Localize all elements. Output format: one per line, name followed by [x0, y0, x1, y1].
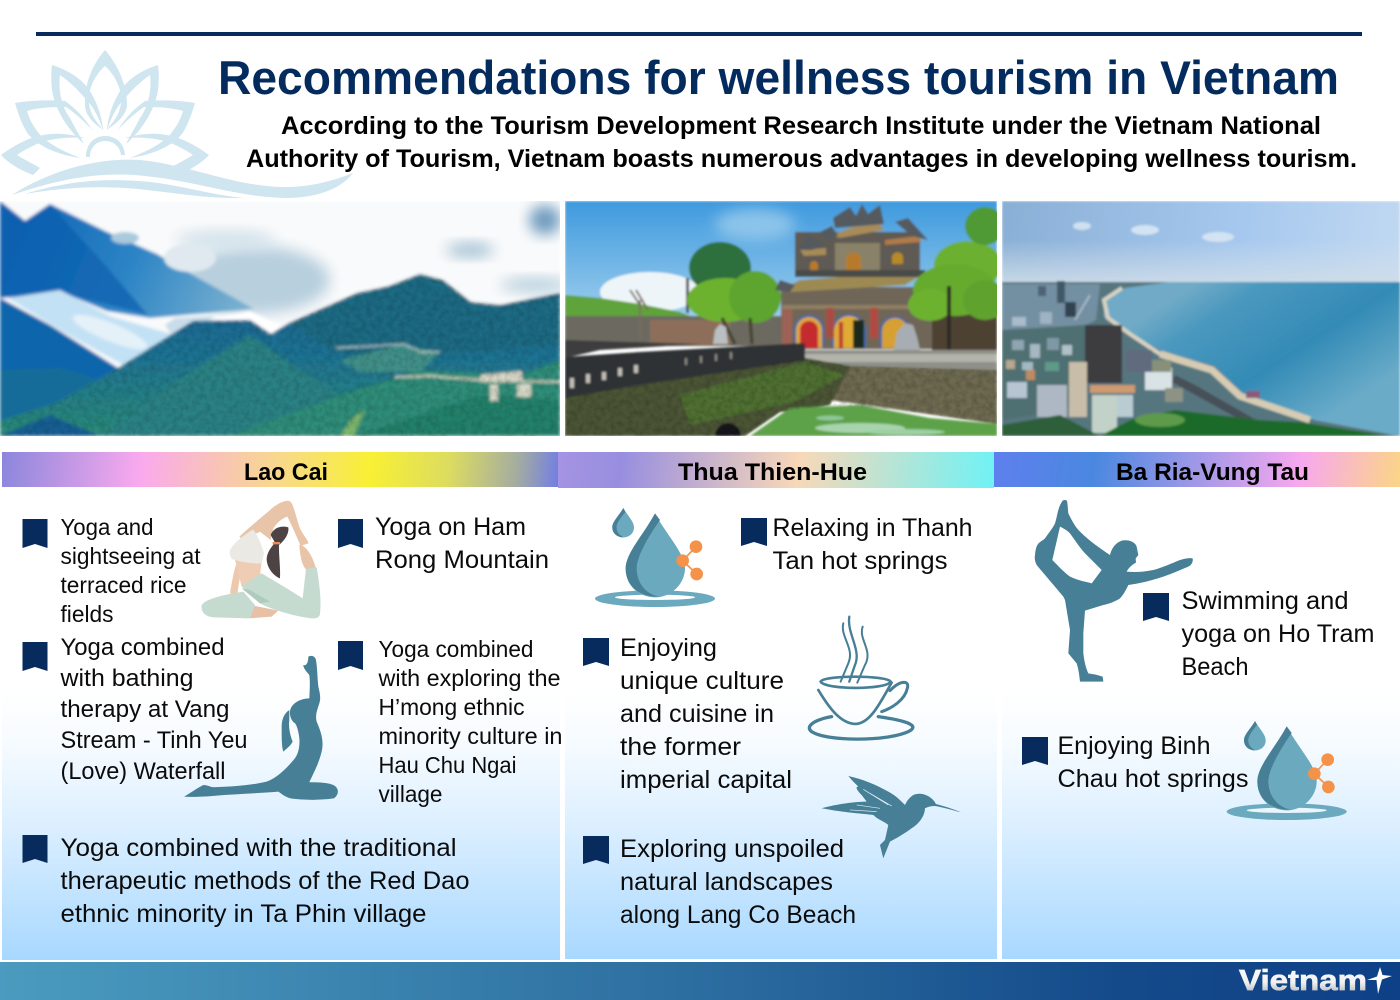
gate lower	[781, 287, 937, 349]
icon: dancer pose silhouette	[1035, 500, 1193, 682]
item: terraced rice fields: fields	[60, 601, 114, 627]
title: Recommendations for wellness tourism in Vietnam	[218, 51, 1339, 104]
icon: water drop	[1227, 721, 1347, 820]
item: Ho Tram Beach: yoga on Ho Tram	[1182, 620, 1374, 648]
item: culture and cuisine	[583, 634, 792, 794]
item: culture and cuisine: unique culture	[620, 667, 784, 695]
panel background	[2, 487, 560, 960]
photo: Hue imperial gate	[565, 201, 1007, 440]
item: Ta Phin village	[22, 834, 470, 928]
heading: Lao Cai: Lao Cai	[244, 459, 328, 486]
top rule	[36, 32, 1362, 36]
photo: Vung Tau coast	[1002, 201, 1400, 436]
item: terraced rice fields: terraced rice	[60, 572, 186, 598]
item: Binh Chau hot springs	[1022, 732, 1248, 793]
item: culture and cuisine: the former	[620, 733, 741, 761]
item: Hau Chu Ngai village: with exploring the	[377, 665, 560, 691]
water and wall	[800, 350, 997, 372]
statues	[894, 323, 920, 350]
panel: Thua Thien-Hue	[558, 452, 997, 959]
item: Vang Stream: Yoga combined	[60, 634, 224, 661]
panel background	[1002, 487, 1400, 959]
item: Hau Chu Ngai village: minority culture in	[378, 723, 562, 749]
icon: water drop	[595, 508, 715, 607]
item: Vang Stream	[22, 634, 248, 785]
item: Ham Rong Mountain: Rong Mountain	[375, 546, 549, 574]
item: Thanh Tan hot springs: Relaxing in Thanh	[772, 514, 972, 542]
item: Ho Tram Beach: Swimming and	[1182, 587, 1348, 615]
subtitle: According to the Tourism Development Research Institute under the Vietnam National	[281, 112, 1321, 140]
item: Vang Stream: Stream - Tinh Yeu	[60, 727, 248, 754]
item: Vang Stream: (Love) Waterfall	[60, 758, 226, 785]
item: Thanh Tan hot springs	[741, 514, 972, 575]
item: culture and cuisine: and cuisine in	[620, 700, 774, 728]
photo: Lao Cai mountains	[0, 201, 570, 440]
logo: Vietnam+: Vietnam	[1239, 965, 1367, 997]
item: Ta Phin village: Yoga combined with the traditional	[60, 834, 456, 862]
item: terraced rice fields: Yoga and	[60, 514, 154, 540]
item: Ta Phin village: therapeutic methods of the Red Dao	[60, 867, 470, 895]
heading: Lao Cai	[2, 452, 558, 487]
item: culture and cuisine: Enjoying	[620, 634, 717, 662]
panel: Ba Ria-Vung Tau	[994, 452, 1400, 959]
item: Lang Co Beach	[583, 835, 856, 929]
right trees	[932, 312, 997, 352]
subtitle	[246, 112, 1357, 173]
heading: Thua Thien-Hue: Thua Thien-Hue	[678, 459, 867, 486]
heading: Ba Ria-Vung Tau	[994, 452, 1400, 487]
item: Lang Co Beach: natural landscapes	[620, 868, 833, 896]
item: Vang Stream: therapy at Vang	[60, 696, 230, 723]
item: Lang Co Beach: Exploring unspoiled	[620, 835, 844, 863]
item: Ham Rong Mountain	[338, 513, 549, 574]
item: Hau Chu Ngai village: H’mong ethnic	[378, 694, 524, 720]
panel background	[565, 487, 997, 959]
panel: Lao Cai	[2, 452, 562, 960]
icon: hummingbird	[822, 776, 961, 858]
item: Binh Chau hot springs: Enjoying Binh	[1058, 732, 1210, 760]
item: Ho Tram Beach: Beach	[1182, 653, 1248, 681]
item: Lang Co Beach: along Lang Co Beach	[620, 901, 856, 929]
heading: Ba Ria-Vung Tau: Ba Ria-Vung Tau	[1116, 459, 1309, 486]
item: Hau Chu Ngai village: Yoga combined	[378, 636, 534, 662]
item: Ta Phin village: ethnic minority in Ta Phin village	[60, 900, 426, 928]
item: Hau Chu Ngai village: village	[378, 781, 442, 807]
item: Binh Chau hot springs: Chau hot springs	[1058, 765, 1248, 793]
item: Thanh Tan hot springs: Tan hot springs	[772, 547, 948, 575]
item: Vang Stream: with bathing	[59, 665, 193, 692]
icon: woman in pigeon yoga pose	[202, 501, 321, 618]
heading: Thua Thien-Hue	[558, 452, 994, 488]
lotus logo	[1, 50, 353, 198]
item: Hau Chu Ngai village	[338, 636, 562, 807]
icon: steaming teacup	[809, 617, 913, 739]
icon: cobra pose silhouette	[184, 656, 338, 800]
subtitle: Authority of Tourism, Vietnam boasts numerous advantages in developing wellness tourism.	[246, 145, 1357, 173]
item: terraced rice fields: sightseeing at	[60, 543, 201, 569]
item: terraced rice fields	[22, 514, 201, 627]
item: Ho Tram Beach	[1143, 587, 1374, 681]
item: Hau Chu Ngai village: Hau Chu Ngai	[378, 752, 516, 778]
item: Ham Rong Mountain: Yoga on Ham	[375, 513, 526, 541]
item: culture and cuisine: imperial capital	[620, 766, 792, 794]
footer bar	[0, 962, 1400, 1000]
